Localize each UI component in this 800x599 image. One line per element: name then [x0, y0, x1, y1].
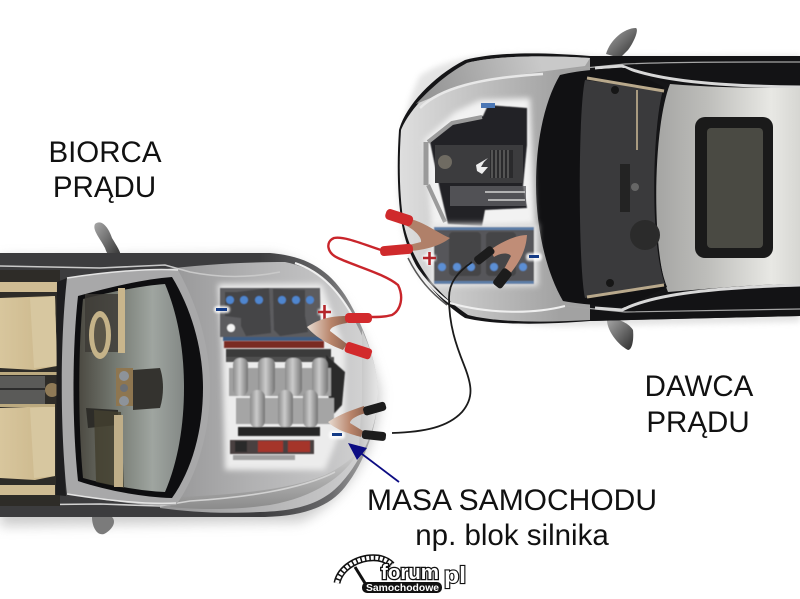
roof [656, 84, 800, 292]
arrow to ground point [348, 443, 399, 482]
black cable [392, 262, 472, 433]
engine V8 [224, 341, 345, 460]
terminal circles [226, 296, 234, 304]
front lower wing highlight [170, 452, 358, 509]
seats and cabin [0, 270, 60, 506]
windshield [74, 277, 203, 498]
clamp: black, donor car [473, 235, 527, 290]
logo: forum samochodowe: pl [444, 562, 466, 588]
engine diesel [424, 98, 535, 228]
logo: forum samochodowe: forum [381, 562, 439, 584]
battery [430, 224, 538, 286]
windshield glass [79, 284, 184, 492]
windshield [536, 68, 667, 307]
icon: lower mirror [607, 318, 633, 350]
hood [160, 262, 377, 513]
label: receiver: BIORCA [48, 136, 162, 169]
label: vehicle ground: MASA SAMOCHODU [367, 484, 657, 517]
nose panel [358, 330, 378, 460]
icon: lower mirror [92, 517, 114, 534]
battery [220, 288, 323, 341]
car shadow [398, 54, 800, 327]
logo: forum samochodowe: Samochodowe [366, 583, 439, 594]
engine bay glow [218, 284, 345, 470]
hood upper panel [416, 56, 590, 104]
icon: sunroof [695, 117, 773, 258]
label: donor second line: PRĄDU [646, 406, 750, 439]
label: donor: DAWCA [645, 370, 754, 403]
car body [398, 53, 800, 324]
label: receiver second line: PRĄDU [53, 171, 156, 204]
hood [400, 56, 590, 322]
pillar [56, 278, 67, 496]
icon: upper mirror [606, 28, 637, 58]
label: engine block example: np. blok silnika [415, 519, 609, 552]
side black window band lower [590, 284, 800, 321]
icon: upper mirror [94, 222, 121, 259]
windshield interior [580, 80, 665, 298]
plus sign left battery [318, 305, 331, 319]
red cable [328, 238, 401, 317]
car shadow [0, 255, 380, 526]
side sill stripes [565, 62, 800, 70]
minus sign right battery [526, 253, 542, 261]
windshield frame [62, 269, 210, 505]
clamp: red, receiver battery [307, 313, 373, 360]
car body [0, 253, 378, 517]
dashboard details [85, 288, 163, 488]
clamp: red, donor car [380, 208, 450, 256]
left car: receiver [0, 222, 380, 534]
dashboard trims [587, 78, 664, 297]
right car: donor [398, 28, 800, 350]
minus sign near ground point [329, 431, 345, 439]
plus sign right battery [423, 252, 436, 265]
clamp: black, ground point [328, 401, 387, 441]
logo: forum samochodowe [337, 558, 466, 594]
minus sign left battery [214, 306, 230, 313]
side black window band upper [590, 56, 800, 86]
